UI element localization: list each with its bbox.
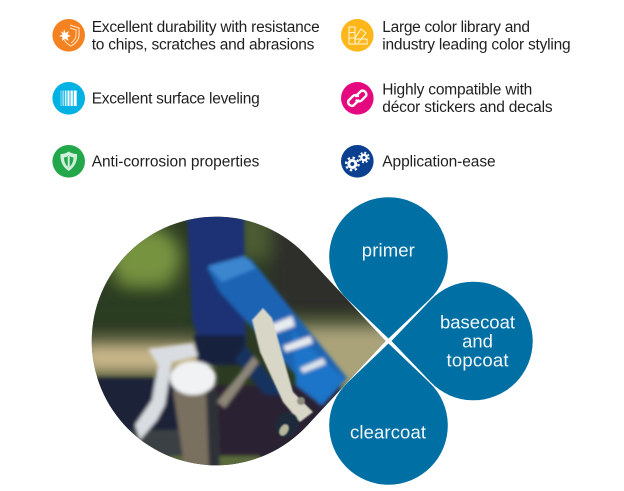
text: Highly compatible with	[382, 82, 532, 98]
drop: basecoat and topcoat: and	[462, 331, 493, 352]
text: industry leading color styling	[382, 36, 571, 53]
icon: shield	[52, 145, 85, 178]
silver brake arm	[135, 343, 198, 440]
text: Anti-corrosion properties	[92, 153, 260, 170]
drop: clearcoat: clearcoat	[350, 421, 426, 442]
icon: color swatches	[341, 19, 374, 52]
photo: bicycle frame in teardrop	[92, 216, 386, 466]
benefit: anti-corrosion	[52, 145, 260, 178]
text: Large color library and	[382, 19, 530, 36]
text	[92, 19, 320, 53]
drop: basecoat and topcoat: basecoat	[440, 311, 515, 332]
text: to chips, scratches and abrasions	[92, 36, 315, 53]
drop: basecoat and topcoat	[392, 282, 533, 400]
text	[382, 19, 571, 53]
benefit: durability	[52, 19, 320, 53]
text: décor stickers and decals	[382, 99, 553, 116]
text: Application-ease	[382, 153, 496, 170]
text: Excellent surface leveling	[92, 90, 260, 107]
text: Excellent durability with resistance	[92, 19, 320, 36]
post	[170, 389, 211, 465]
drop: primer	[329, 197, 448, 338]
benefit: sticker compatibility	[341, 82, 553, 116]
drop: basecoat and topcoat: topcoat	[446, 350, 508, 371]
icon: gears	[341, 145, 374, 178]
benefit: color library	[341, 19, 571, 53]
brake lever	[252, 308, 313, 422]
dark lower band	[97, 376, 180, 432]
drop: clearcoat	[329, 344, 448, 485]
benefit: application ease	[341, 145, 496, 178]
navy tube	[187, 212, 246, 345]
benefit: surface leveling	[52, 82, 260, 115]
icon: leveling bars	[52, 82, 85, 115]
icon: chain link	[341, 82, 374, 115]
drop: primer: primer	[362, 240, 415, 261]
white bands	[270, 316, 295, 334]
blue diagonal tube	[207, 258, 347, 405]
icon: shield with impact	[52, 19, 85, 52]
text	[382, 82, 553, 116]
